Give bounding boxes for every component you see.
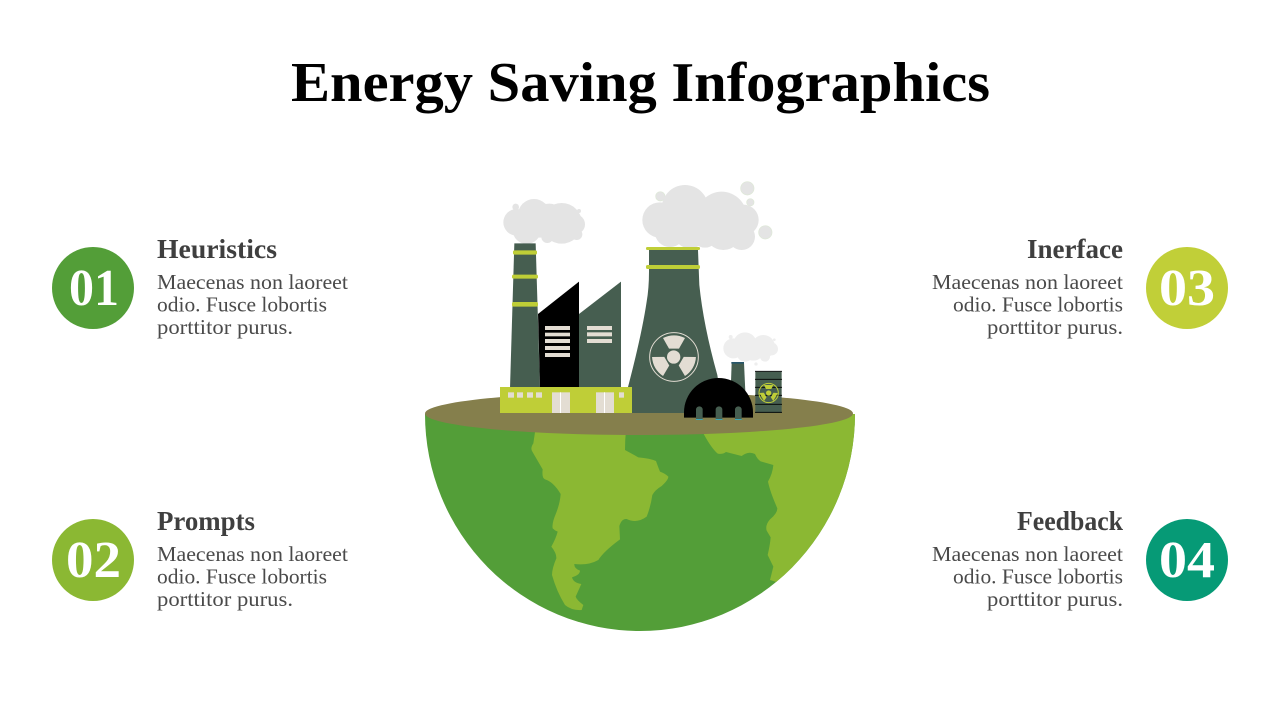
title: Energy Saving Infographics: [291, 52, 990, 114]
text block: Heuristics description: porttitor purus.: [157, 315, 293, 339]
number badge 01: [52, 247, 134, 329]
text block: Feedback description: Maecenas non laoreet: [932, 542, 1123, 566]
number badge 01: 01: [69, 260, 119, 317]
reactor dome: [684, 378, 753, 420]
text block: Heuristics description: odio. Fusce lobortis: [157, 292, 327, 316]
text block: Inerface description: porttitor purus.: [987, 315, 1123, 339]
text block: Heuristics description: [157, 270, 348, 339]
continent: Africa: [704, 414, 855, 582]
heading: Inerface: Inerface: [1027, 234, 1123, 264]
text block: Feedback description: [932, 542, 1123, 611]
text block: Prompts description: Maecenas non laoreet: [157, 542, 348, 566]
smoke: small chimney: [723, 332, 778, 366]
icon: half globe: [425, 392, 867, 631]
number badge 04: [1146, 519, 1228, 601]
text block: Inerface description: Maecenas non laoreet: [932, 270, 1123, 294]
cooling tower: [627, 247, 723, 413]
panel: item 01 Heuristics: [52, 234, 348, 339]
text block: Heuristics description: Maecenas non laoreet: [157, 270, 348, 294]
text block: Feedback description: odio. Fusce lobortis: [953, 564, 1123, 588]
smoke: cooling tower: [656, 182, 772, 239]
icon: nuclear power plant: [500, 182, 782, 420]
icon: radiation symbol: [650, 333, 698, 381]
panel: item 02 Prompts: [52, 506, 348, 611]
small chimney: [731, 362, 745, 392]
heading: Prompts: Prompts: [157, 506, 255, 536]
ground disc: [425, 392, 853, 435]
number badge 02: [52, 519, 134, 601]
number badge 03: [1146, 247, 1228, 329]
text block: Feedback description: porttitor purus.: [987, 587, 1123, 611]
heading: Feedback: Feedback: [1017, 506, 1123, 536]
number badge 02: 02: [66, 532, 121, 589]
number badge 04: 04: [1159, 532, 1215, 589]
continent: South America: [531, 430, 668, 610]
factory building: [538, 282, 621, 388]
heading: Heuristics: Heuristics: [157, 234, 277, 264]
text block: Inerface description: odio. Fusce lobortis: [953, 292, 1123, 316]
text block: Inerface description: [932, 270, 1123, 339]
text block: Prompts description: porttitor purus.: [157, 587, 293, 611]
text block: Prompts description: odio. Fusce lobortis: [157, 564, 327, 588]
left chimney: [510, 243, 540, 388]
panel: item 04 Feedback: [932, 506, 1228, 611]
text block: Prompts description: [157, 542, 348, 611]
smoke: left chimney: [503, 199, 585, 244]
panel: item 03 Inerface: [932, 234, 1228, 339]
factory base: [500, 387, 632, 413]
number badge 03: 03: [1159, 260, 1215, 317]
icon: waste barrel: [755, 371, 782, 413]
